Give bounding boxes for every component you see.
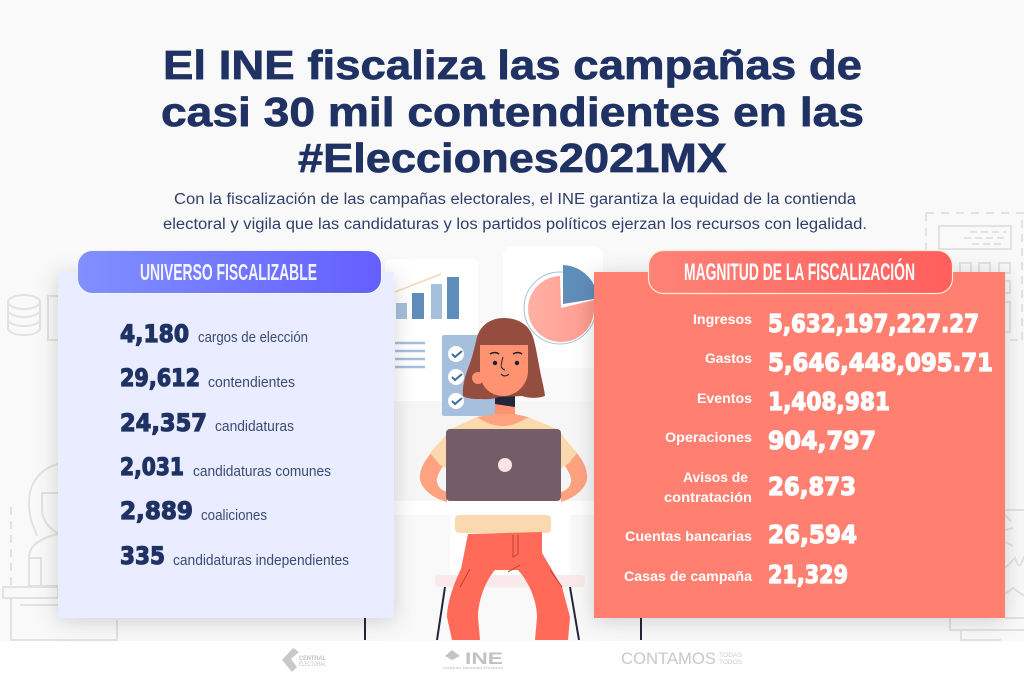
row: cuentas bancarias bbox=[625, 520, 857, 549]
logo: INE: INE bbox=[465, 649, 503, 668]
logo: contamos: TODOS bbox=[719, 660, 742, 666]
row: gastos: Gastos bbox=[705, 351, 752, 366]
row: eventos: Eventos bbox=[697, 391, 752, 406]
row: cargos de elección bbox=[120, 320, 308, 348]
row: eventos bbox=[697, 387, 890, 416]
logo: central electoral bbox=[282, 648, 326, 672]
eyes and mouth bbox=[493, 361, 497, 365]
ghost icon: gear bbox=[950, 510, 1024, 640]
row: ingresos: 5,632,197,227.27 bbox=[768, 309, 979, 338]
chair seat bbox=[435, 575, 585, 587]
row: avisos de contratación bbox=[664, 470, 856, 505]
row: coaliciones: 2,889 bbox=[120, 497, 193, 525]
panel: magnitud de la fiscalización bbox=[594, 250, 1005, 618]
row: avisos de contratación: Avisos de bbox=[683, 470, 748, 485]
row: casas de campaña: 21,329 bbox=[768, 560, 848, 589]
row: operaciones bbox=[665, 426, 876, 455]
row: candidaturas: 24,357 bbox=[120, 409, 207, 437]
collar skin bbox=[477, 414, 528, 426]
row: contendientes: 29,612 bbox=[120, 364, 200, 392]
illustration: woman with laptop bbox=[365, 265, 641, 640]
subtitle: Con la fiscalización de las campañas electorales, el INE garantiza la equidad de la contienda bbox=[174, 191, 856, 208]
logo: central electoral: CENTRAL bbox=[299, 656, 326, 662]
subtitle bbox=[163, 191, 867, 233]
title: casi 30 mil contendientes en las bbox=[161, 89, 864, 135]
illustration backdrop bbox=[385, 246, 603, 575]
row: casas de campaña: Casas de campaña bbox=[624, 569, 753, 584]
row: operaciones: Operaciones bbox=[665, 430, 752, 445]
row: cargos de elección: cargos de elección bbox=[198, 330, 308, 346]
row: candidaturas bbox=[120, 409, 294, 437]
row: cuentas bancarias: 26,594 bbox=[768, 520, 857, 549]
chart: bar chart bbox=[395, 274, 459, 367]
row: operaciones: 904,797 bbox=[768, 426, 876, 455]
row: ingresos bbox=[693, 309, 979, 338]
logo: contamos: TODAS bbox=[719, 653, 742, 659]
logo: contamos: CONTAMOS bbox=[621, 649, 716, 668]
waist bbox=[455, 515, 551, 533]
pants bbox=[447, 532, 570, 640]
logo: INE: Instituto Nacional Electoral bbox=[443, 665, 503, 670]
table legs bbox=[365, 618, 641, 640]
title: #Elecciones2021MX bbox=[298, 135, 727, 181]
footer band bbox=[0, 641, 1024, 682]
ghost icon: dashboard bbox=[926, 213, 1024, 340]
row: candidaturas comunes: candidaturas comunes bbox=[193, 464, 331, 480]
subtitle: electoral y vigila que las candidaturas y los partidos políticos ejerzan los recursos con legalidad. bbox=[163, 216, 867, 233]
row: coaliciones bbox=[120, 497, 267, 525]
laptop bbox=[446, 429, 561, 501]
row: contendientes: contendientes bbox=[208, 375, 295, 391]
row: candidaturas: candidaturas bbox=[215, 419, 294, 435]
title bbox=[161, 42, 864, 181]
hair bbox=[463, 318, 545, 399]
background ghost icons bbox=[3, 213, 1024, 640]
chair legs bbox=[437, 587, 579, 640]
row: candidaturas independientes: candidaturas independientes bbox=[173, 553, 349, 569]
row: eventos: 1,408,981 bbox=[768, 387, 890, 416]
heading pill: magnitud bbox=[648, 250, 952, 294]
heading pill: universo bbox=[78, 250, 382, 294]
row: candidaturas comunes bbox=[120, 453, 331, 481]
title: El INE fiscaliza las campañas de bbox=[163, 42, 862, 88]
row: gastos: 5,646,448,095.71 bbox=[768, 348, 993, 377]
row: candidaturas independientes bbox=[120, 542, 349, 570]
ghost icon: coin stack bbox=[8, 295, 60, 340]
row: cargos de elección: 4,180 bbox=[120, 320, 189, 348]
left arm bbox=[420, 452, 447, 502]
logo: central electoral: ELECTORAL bbox=[299, 662, 326, 668]
row: cuentas bancarias: Cuentas bancarias bbox=[625, 529, 752, 544]
icon: checklist bbox=[442, 335, 495, 416]
figure: woman bbox=[365, 318, 641, 640]
face bbox=[480, 345, 528, 396]
row: candidaturas comunes: 2,031 bbox=[120, 453, 184, 481]
logo: INE bbox=[443, 649, 503, 670]
row: casas de campaña bbox=[624, 560, 848, 589]
shirt bbox=[430, 417, 577, 469]
ghost icon: person at desk bbox=[3, 464, 117, 640]
heading pill: universo: UNIVERSO FISCALIZABLE bbox=[140, 259, 317, 285]
neck bbox=[495, 398, 515, 418]
row: ingresos: Ingresos bbox=[693, 312, 752, 327]
row: avisos de contratación: 26,873 bbox=[768, 472, 856, 501]
row: avisos de contratación: contratación bbox=[664, 490, 752, 505]
row: candidaturas independientes: 335 bbox=[120, 542, 165, 570]
row: contendientes bbox=[120, 364, 295, 392]
row: coaliciones: coaliciones bbox=[201, 508, 267, 524]
chart: pie chart bbox=[524, 265, 596, 344]
right arm bbox=[561, 452, 587, 502]
ear bbox=[472, 372, 484, 384]
panel: universo fiscalizable bbox=[58, 250, 394, 618]
